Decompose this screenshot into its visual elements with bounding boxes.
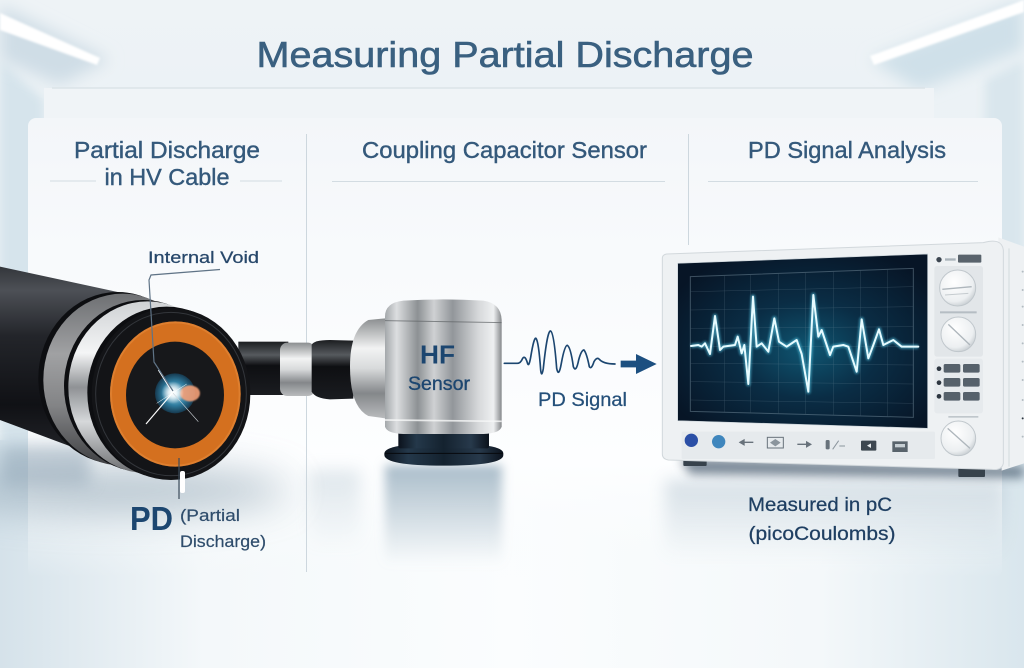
side dots — [1022, 271, 1024, 438]
divider 1 — [306, 134, 308, 572]
right control panel — [934, 255, 983, 456]
leader line: internal void — [149, 270, 220, 391]
internal void — [155, 373, 195, 413]
heading: coupling capacitor sensor: Coupling Capacitor Sensor — [362, 137, 647, 163]
discharge spark — [146, 370, 198, 424]
sensor label sensor: Sensor — [408, 374, 470, 395]
heading: partial discharge in HV cable — [50, 137, 282, 190]
screen — [678, 254, 928, 428]
cable end face — [92, 308, 250, 480]
button grid — [944, 364, 980, 401]
orange semiconductor ring — [110, 321, 241, 467]
ceiling light right — [870, 0, 1024, 65]
orange discharge glow — [180, 385, 200, 401]
knob 1 — [940, 270, 976, 306]
HF sensor — [280, 299, 657, 466]
arrow — [621, 354, 657, 374]
feet — [683, 455, 985, 477]
heading: PD signal analysis: PD Signal Analysis — [748, 137, 946, 163]
label: measured in pC: Measured in pC — [748, 495, 892, 516]
grey armour band — [43, 294, 202, 466]
heading: partial discharge in HV cable: Partial Discharge — [74, 137, 260, 163]
ceiling light left — [0, 13, 100, 65]
monitor front — [662, 241, 1003, 470]
sensor body — [385, 299, 502, 434]
label: partial discharge — [180, 506, 266, 551]
panel backdrop — [28, 118, 1002, 578]
monitor shadow — [680, 458, 1024, 478]
sensor flange — [350, 318, 385, 418]
cable jacket — [0, 267, 118, 464]
sensor label HF: HF — [420, 339, 455, 369]
label: measured in pC — [748, 495, 896, 545]
oscilloscope monitor — [662, 237, 1024, 477]
leader line: PD — [179, 458, 185, 499]
thin cable connecting to sensor — [238, 342, 288, 395]
label: internal void: Internal Void — [148, 248, 259, 267]
HV cable — [0, 267, 250, 480]
connector black — [312, 340, 353, 399]
waveform — [504, 331, 615, 374]
black insulation core — [126, 342, 224, 448]
label: PD: PD — [130, 500, 173, 537]
label: PD signal: PD Signal — [538, 390, 627, 411]
label: partial discharge: Discharge) — [180, 532, 266, 551]
title: Measuring Partial Discharge — [256, 34, 754, 75]
heading: partial discharge in HV cable: in HV Cable — [104, 164, 230, 190]
bottom control strip — [682, 432, 935, 459]
chrome band — [68, 301, 227, 473]
trace — [691, 295, 918, 392]
trace glow — [691, 295, 918, 392]
label: partial discharge: (Partial — [180, 506, 240, 525]
screen grid — [690, 268, 913, 417]
floor reflections — [0, 445, 1005, 565]
base flange — [384, 443, 503, 466]
base neck — [398, 432, 489, 448]
label: measured in pC: (picoCoulombs) — [748, 524, 896, 545]
knob 2 — [941, 317, 976, 352]
connector silver — [280, 343, 315, 396]
divider 2 — [688, 134, 690, 245]
monitor side — [998, 237, 1024, 471]
knob 3 — [941, 421, 976, 456]
